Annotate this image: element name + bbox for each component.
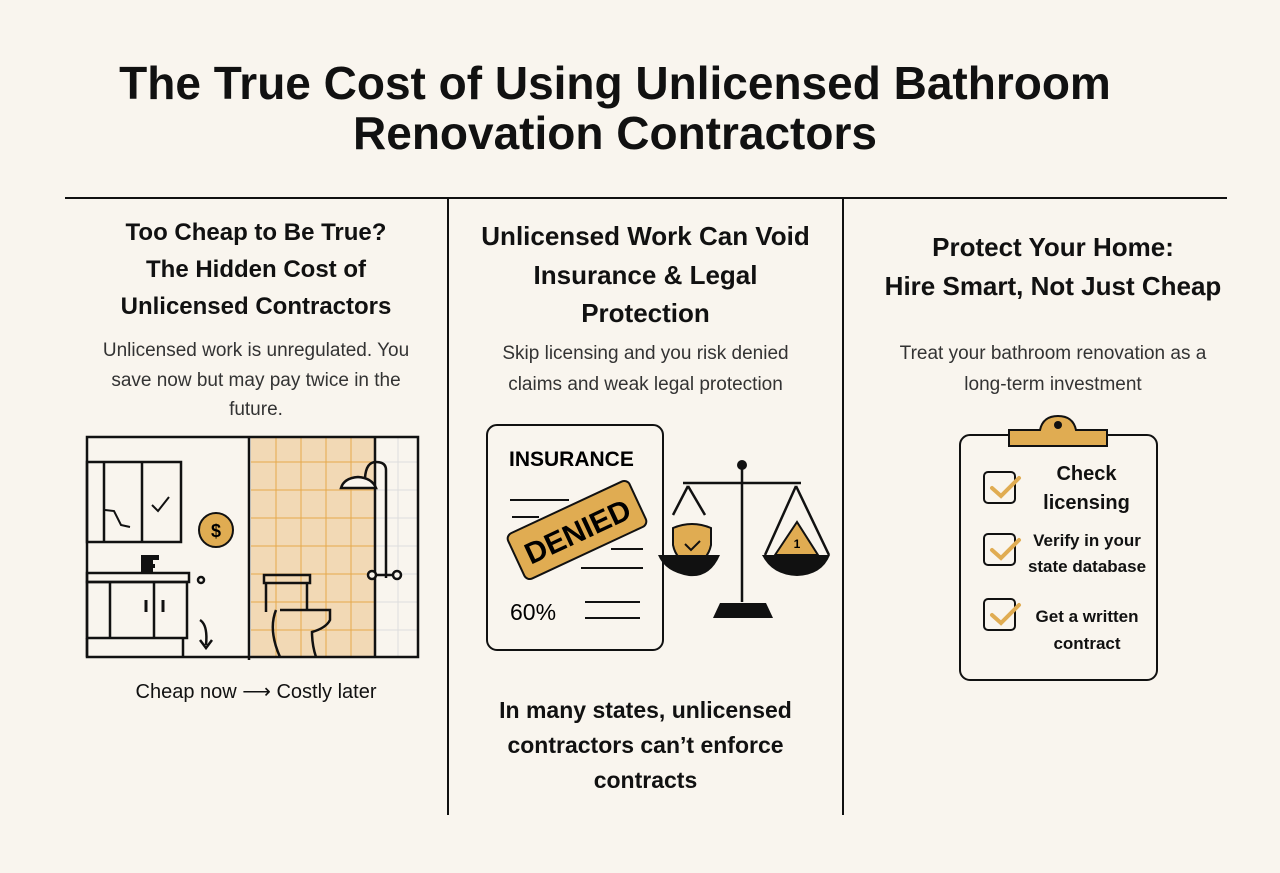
panel: hidden cost: [86, 219, 420, 703]
illustration: insurance denied and scale: DENIED: [520, 493, 636, 571]
text: denied claims: claims and weak legal protection: [508, 374, 783, 395]
text: denied claims: [502, 343, 789, 395]
title: Renovation Contractors: [353, 107, 877, 159]
heading: void insurance: Insurance & Legal: [534, 260, 757, 290]
checklist items: licensing: [1043, 492, 1130, 514]
icon: clipboard checklist: contract: [1053, 634, 1121, 653]
icon: clipboard checklist: Verify in your: [1033, 531, 1141, 550]
heading: void insurance: Unlicensed Work Can Void: [481, 221, 810, 251]
panel: insurance: [481, 221, 830, 793]
heading: void insurance: [481, 221, 810, 328]
text: long-term investment: [900, 343, 1206, 395]
title: The True Cost of Using Unlicensed Bathroom: [119, 57, 1111, 109]
checklist items: [1043, 463, 1130, 514]
illustration: insurance denied and scale: 60%: [510, 599, 556, 625]
illustration: insurance denied and scale: 1: [794, 537, 801, 551]
heading: too cheap: Too Cheap to Be True?: [126, 219, 386, 246]
heading: hire smart: [885, 232, 1221, 301]
heading: void insurance: Protection: [581, 298, 710, 328]
text: unregulated: Unlicensed work is unregulated. You: [103, 340, 409, 361]
text: cannot enforce contracts: In many states, unlicensed contractors can’t enforce contracts: [499, 697, 792, 793]
text: unregulated: [103, 340, 409, 420]
panel: protect your home: [885, 232, 1221, 681]
heading: too cheap: [121, 219, 391, 320]
illustration: insurance denied and scale: INSURANCE: [509, 448, 634, 471]
icon: clipboard checklist: Get a written: [1036, 607, 1138, 626]
heading: hire smart: Protect Your Home:: [932, 232, 1174, 262]
illustration: bathroom: $: [211, 521, 221, 541]
illustration: bathroom: [86, 436, 420, 660]
heading: hire smart: Hire Smart, Not Just Cheap: [885, 271, 1221, 301]
text: unregulated: future.: [229, 399, 283, 420]
text: long-term investment: long-term investment: [964, 374, 1142, 395]
illustration: insurance denied and scale: [486, 424, 830, 651]
heading: too cheap: The Hidden Cost of: [146, 256, 366, 283]
icon: clipboard checklist: state database: [1028, 557, 1146, 576]
heading: too cheap: Unlicensed Contractors: [121, 293, 391, 320]
icon: clipboard checklist: [959, 415, 1158, 681]
text: denied claims: Skip licensing and you risk denied: [502, 343, 789, 364]
caption: cheap now costly later: Cheap now ⟶ Costly later: [136, 681, 376, 703]
checklist items: Check: [1056, 463, 1117, 485]
title: [119, 57, 1111, 159]
text: unregulated: save now but may pay twice in the: [111, 370, 401, 390]
text: long-term investment: Treat your bathroom renovation as a: [900, 343, 1206, 364]
